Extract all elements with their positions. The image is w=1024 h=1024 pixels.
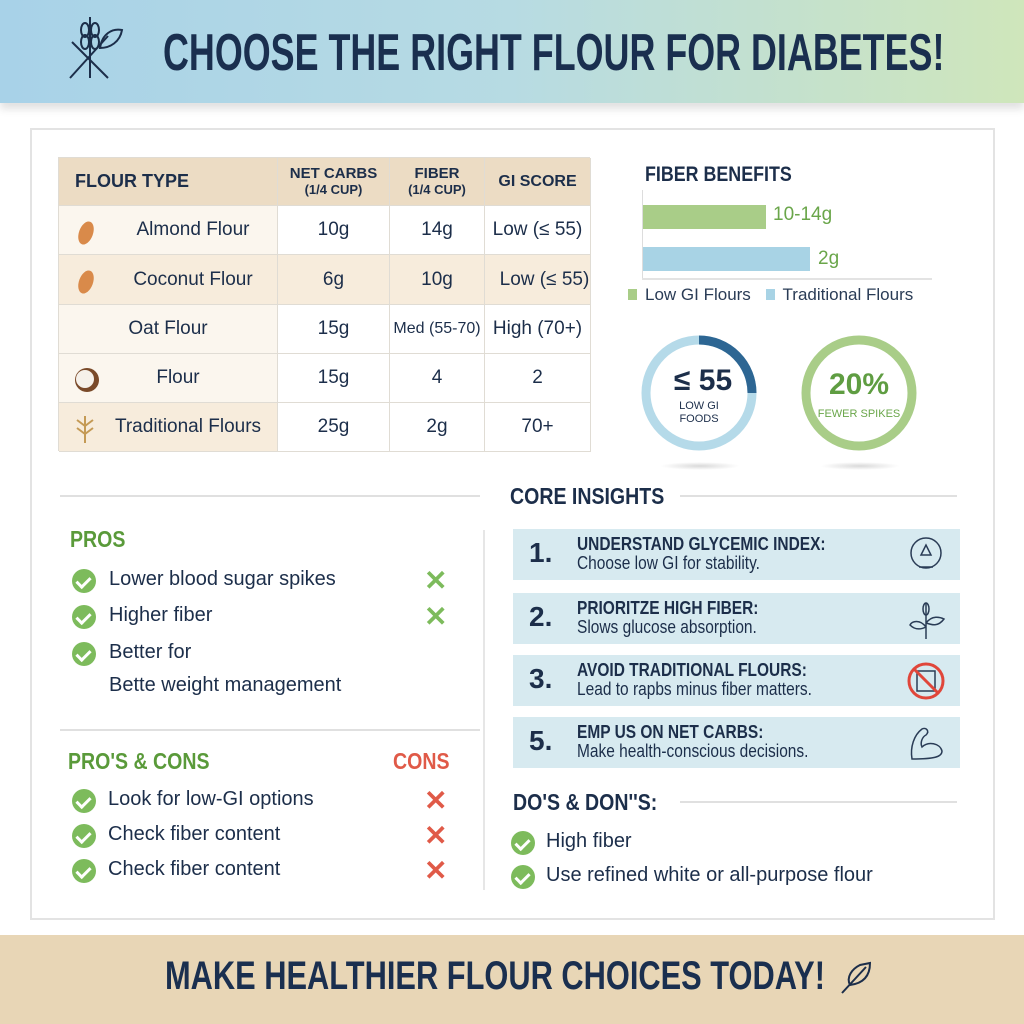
insight 1: 1.	[529, 537, 552, 568]
footer text: MAKE HEALTHIER FLOUR CHOICES TODAY!	[165, 954, 825, 998]
stat circle: low GI: LOW GI	[679, 400, 719, 412]
insight 1	[513, 529, 960, 580]
row: oat	[59, 305, 278, 354]
table: flour comparison: 10g	[421, 268, 453, 290]
row: coconut: Coconut Flour	[133, 268, 253, 290]
insight 3: Lead to rapbs minus fiber matters.	[577, 679, 812, 699]
legend: Low GI Flours Traditional Flours	[645, 285, 913, 304]
table: flour comparison: 15g	[318, 367, 349, 388]
heading: core insights: CORE INSIGHTS	[510, 483, 664, 509]
bar chart: fiber	[642, 190, 932, 280]
pros list	[72, 565, 447, 696]
heading: pro's & cons: PRO'S & CONS	[68, 748, 210, 774]
table: flour comparison: NET CARBS	[290, 164, 377, 182]
row: flour: Flour	[156, 367, 200, 388]
insight 3	[513, 655, 960, 706]
table: flour comparison: 4	[432, 367, 442, 388]
insight 2	[513, 593, 960, 644]
insight 5	[513, 717, 960, 768]
insight 2: Slows glucose absorption.	[577, 617, 757, 637]
main panel	[30, 128, 995, 920]
stat circle: fewer spikes: FEWER SPIKES	[818, 408, 900, 420]
icon: leaf	[841, 962, 871, 994]
row: oat: Oat Flour	[128, 318, 208, 339]
table: flour comparison: (1/4 CUP)	[305, 182, 362, 196]
cons list: ✕	[424, 820, 447, 851]
table: flour comparison: Low (≤ 55)	[500, 268, 589, 290]
insight 3: 3.	[529, 663, 552, 694]
row: coconut	[59, 255, 278, 305]
table: flour comparison	[58, 157, 590, 451]
cons list: Look for low-GI options	[108, 788, 314, 810]
table: flour comparison: 15g	[318, 318, 349, 339]
cons list	[72, 785, 447, 886]
title: CHOOSE THE RIGHT FLOUR FOR DIABETES!	[163, 24, 944, 82]
bar chart: fiber: 10-14g	[773, 204, 832, 225]
heading: fiber benefits: FIBER BENEFITS	[645, 163, 792, 186]
stat circle: fewer spikes	[802, 336, 916, 450]
do's list: High fiber	[546, 830, 632, 852]
table: flour comparison: 70+	[521, 416, 554, 437]
stat circle: low GI: FOODS	[679, 413, 719, 425]
table: flour comparison: Low (≤ 55)	[493, 219, 582, 240]
table: flour comparison: FIBER	[414, 164, 460, 182]
row: flour	[59, 354, 278, 403]
icon: wheat	[69, 17, 124, 79]
cons list: ✕	[424, 855, 447, 886]
stat circle: low GI: ≤ 55	[674, 364, 732, 397]
table: flour comparison: Med (55-70)	[393, 320, 481, 337]
cons list: Check fiber content	[108, 823, 280, 845]
table: flour comparison: GI SCORE	[498, 172, 577, 190]
stat circle: fewer spikes: 20%	[829, 368, 889, 401]
bar chart: fiber: 2g	[818, 248, 839, 269]
header banner	[0, 0, 1024, 103]
table: flour comparison: (1/4 CUP)	[408, 182, 466, 196]
row: almond	[59, 206, 278, 255]
table: flour comparison: 2	[532, 367, 543, 388]
heading: do's & don'ts: DO'S & DON''S:	[513, 789, 657, 815]
pros list: ✕	[424, 601, 447, 632]
insight 1: Choose low GI for stability.	[577, 553, 760, 573]
pros list: Bette weight management	[109, 674, 341, 696]
pros list: ✕	[424, 565, 447, 596]
do's list: Use refined white or all-purpose flour	[546, 864, 873, 886]
heading: pros: PROS	[70, 526, 125, 552]
footer banner	[0, 935, 1024, 1024]
insight 2: 2.	[529, 601, 552, 632]
row: almond: Almond Flour	[136, 219, 250, 240]
row: traditional: Traditional Flours	[115, 416, 261, 437]
insight 5: EMP US ON NET CARBS:	[577, 722, 763, 742]
heading: pro's & cons	[68, 748, 449, 774]
insight 5: Make health-conscious decisions.	[577, 741, 808, 761]
table: flour comparison: 10g	[318, 219, 349, 240]
insight 5: 5.	[529, 725, 552, 756]
insight 3: AVOID TRADITIONAL FLOURS:	[577, 660, 807, 680]
table: flour comparison: 14g	[421, 219, 453, 240]
table: flour comparison: 25g	[318, 416, 349, 437]
pros list: Better for	[109, 641, 191, 663]
insight 2: PRIORITZE HIGH FIBER:	[577, 598, 758, 618]
row: traditional	[59, 403, 278, 452]
pros list: Lower blood sugar spikes	[109, 568, 336, 590]
heading: pro's & cons: CONS	[393, 748, 449, 774]
cons list: ✕	[424, 785, 447, 816]
do's list	[511, 830, 873, 889]
table: flour comparison: High (70+)	[493, 318, 582, 339]
table: flour comparison: FLOUR TYPE	[75, 171, 189, 191]
pros list: Higher fiber	[109, 604, 212, 626]
insight 1: UNDERSTAND GLYCEMIC INDEX:	[577, 534, 826, 554]
cons list: Check fiber content	[108, 858, 280, 880]
stat circle: low GI	[642, 336, 756, 450]
table: flour comparison: 2g	[426, 416, 448, 437]
table: flour comparison: 6g	[323, 268, 344, 290]
